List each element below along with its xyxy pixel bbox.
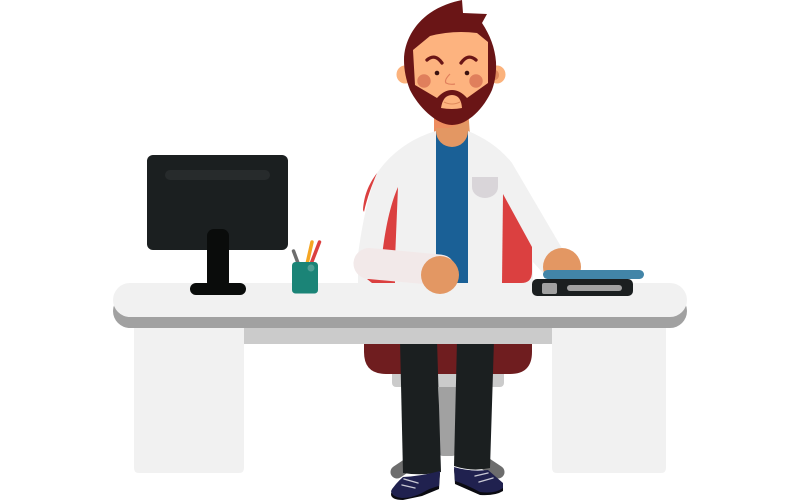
neck <box>434 108 470 135</box>
shoes <box>391 467 503 500</box>
desk legs <box>134 320 666 473</box>
legs: trousers <box>400 340 494 474</box>
books <box>532 270 644 296</box>
hair and beard <box>404 0 496 125</box>
right hand <box>543 248 581 286</box>
desk <box>113 283 687 473</box>
left arm <box>369 256 459 294</box>
ears <box>396 66 506 84</box>
eyes and brows <box>427 57 476 75</box>
coat <box>358 131 563 283</box>
nose <box>446 74 455 84</box>
shirt <box>436 131 468 284</box>
face <box>413 32 488 98</box>
head <box>396 0 506 125</box>
chair <box>364 344 532 472</box>
pencil cup <box>292 242 320 294</box>
cheeks <box>417 74 483 88</box>
desk top <box>113 283 687 317</box>
desk edge <box>113 294 687 328</box>
monitor <box>147 155 288 295</box>
coat red lining <box>363 173 532 283</box>
desk under-panel <box>244 328 552 344</box>
collar skin <box>436 128 468 147</box>
coat pocket <box>472 177 498 198</box>
mouth <box>441 95 462 109</box>
